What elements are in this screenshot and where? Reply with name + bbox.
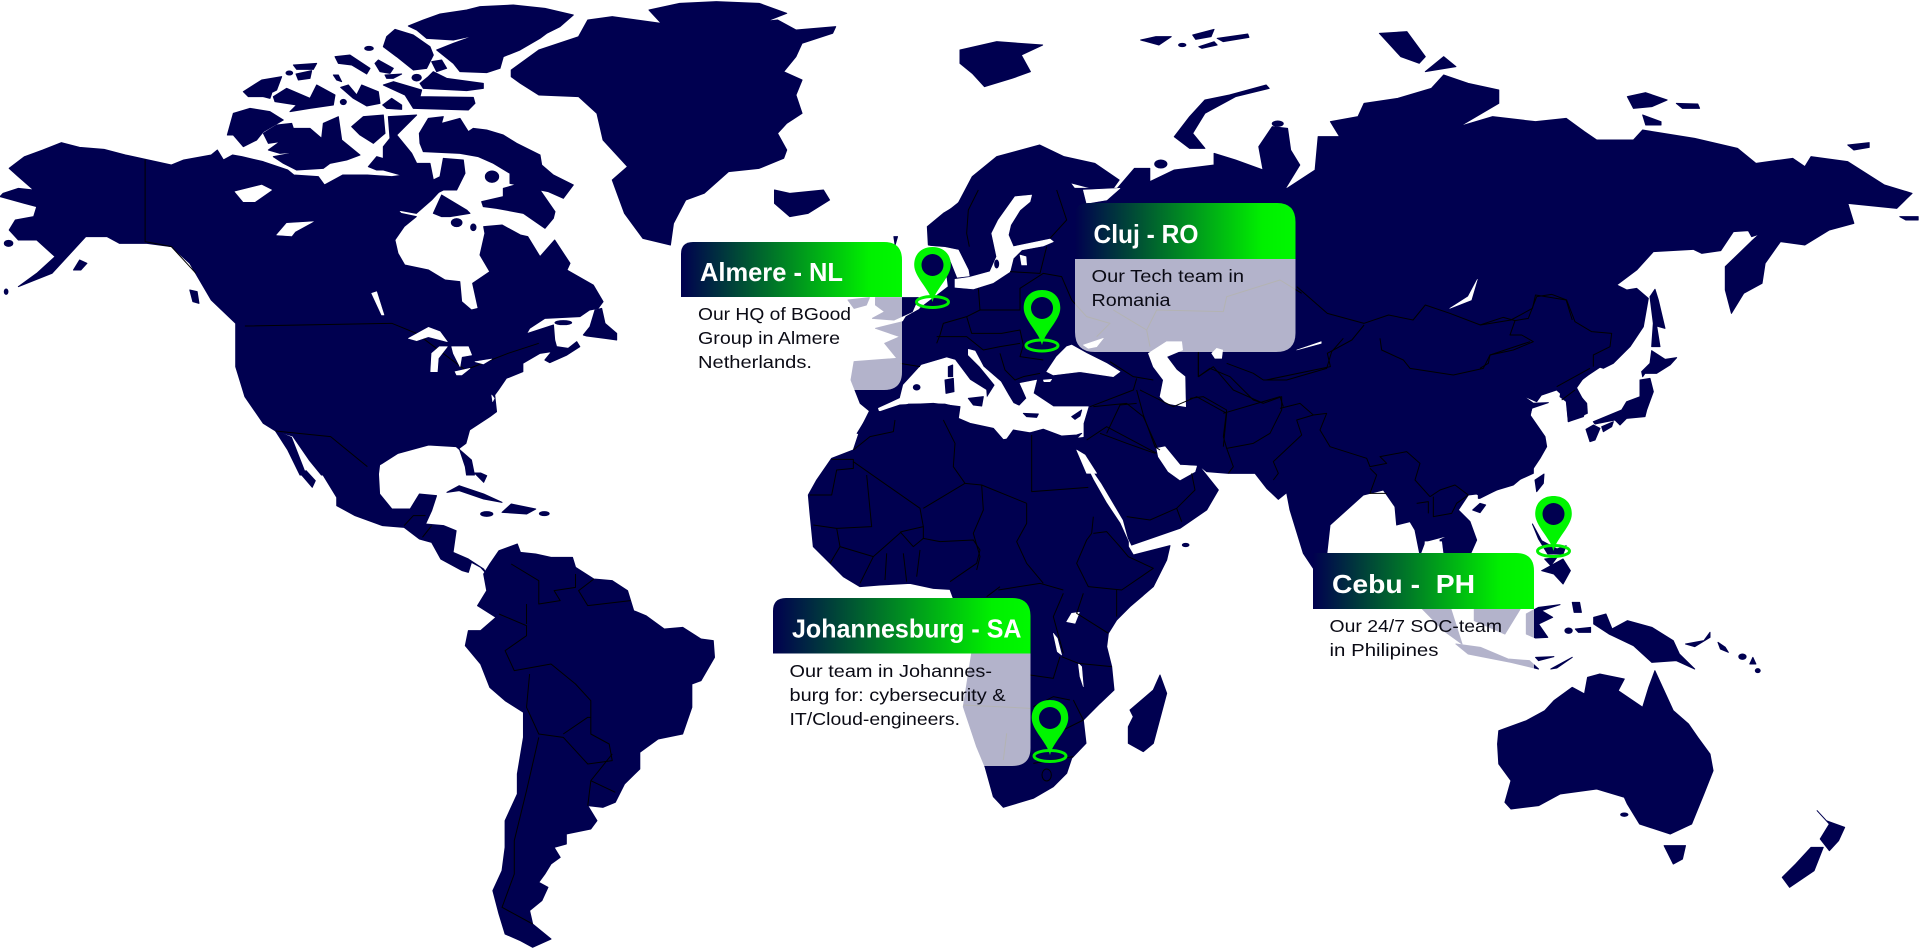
description	[1330, 616, 1502, 660]
description	[790, 661, 1006, 729]
heading: Cluj - RO	[1094, 219, 1198, 249]
heading: Almere - NL	[700, 257, 843, 287]
icon: map pin Cebu	[1535, 496, 1572, 556]
map: europe inland seas, islands and borders	[878, 188, 1302, 453]
map: africa	[808, 403, 1189, 807]
description: IT/Cloud-engineers.	[790, 709, 960, 729]
description	[698, 304, 851, 372]
description: in Philipines	[1330, 640, 1439, 660]
icon: map pin Almere	[914, 247, 951, 308]
icon: map pin Johannesburg	[1032, 700, 1068, 762]
description: Our 24/7 SOC-team	[1330, 616, 1502, 636]
map: russia and arctic islands	[958, 29, 1918, 350]
panel body	[1075, 259, 1296, 352]
map: oceania and maritime southeast asia	[1419, 524, 1845, 887]
map: south asia seas and borders	[1077, 338, 1530, 555]
map: south america and central america	[300, 471, 714, 947]
panel: Cebu - PH	[1313, 553, 1534, 701]
panel body	[1313, 609, 1534, 701]
description: Our team in Johannes-	[790, 661, 992, 681]
description: Netherlands.	[698, 352, 812, 372]
map: north america and greenland	[0, 2, 962, 475]
description: Romania	[1092, 290, 1171, 310]
description: Our HQ of BGood	[698, 304, 851, 324]
heading: Johannesburg - SA	[792, 614, 1022, 644]
panel header	[773, 598, 1030, 654]
panel: Johannesburg - SA	[773, 598, 1030, 766]
map: canadian arctic islands	[227, 5, 573, 231]
description	[1092, 266, 1244, 310]
map: great lakes	[372, 292, 494, 402]
map: canadian lakes	[235, 185, 313, 236]
panel: Almere - NL	[681, 242, 902, 390]
panel header	[681, 242, 902, 297]
panel header	[1075, 203, 1296, 259]
heading: Cebu - PH	[1332, 569, 1475, 599]
map: eurasian landmass	[880, 188, 1782, 568]
description: Our Tech team in	[1092, 266, 1244, 286]
panel header	[1313, 553, 1534, 609]
icon: map pin Cluj	[1024, 290, 1060, 351]
map: central asia borders and lake baikal	[1266, 279, 1572, 380]
map: east asia borders	[1480, 294, 1612, 400]
panel body	[773, 654, 1030, 766]
panel: Cluj - RO	[1075, 203, 1296, 352]
map: newfoundland	[555, 308, 617, 340]
panel body	[681, 297, 902, 390]
description: Group in Almere	[698, 328, 840, 348]
description: burg for: cybersecurity &	[790, 685, 1006, 705]
